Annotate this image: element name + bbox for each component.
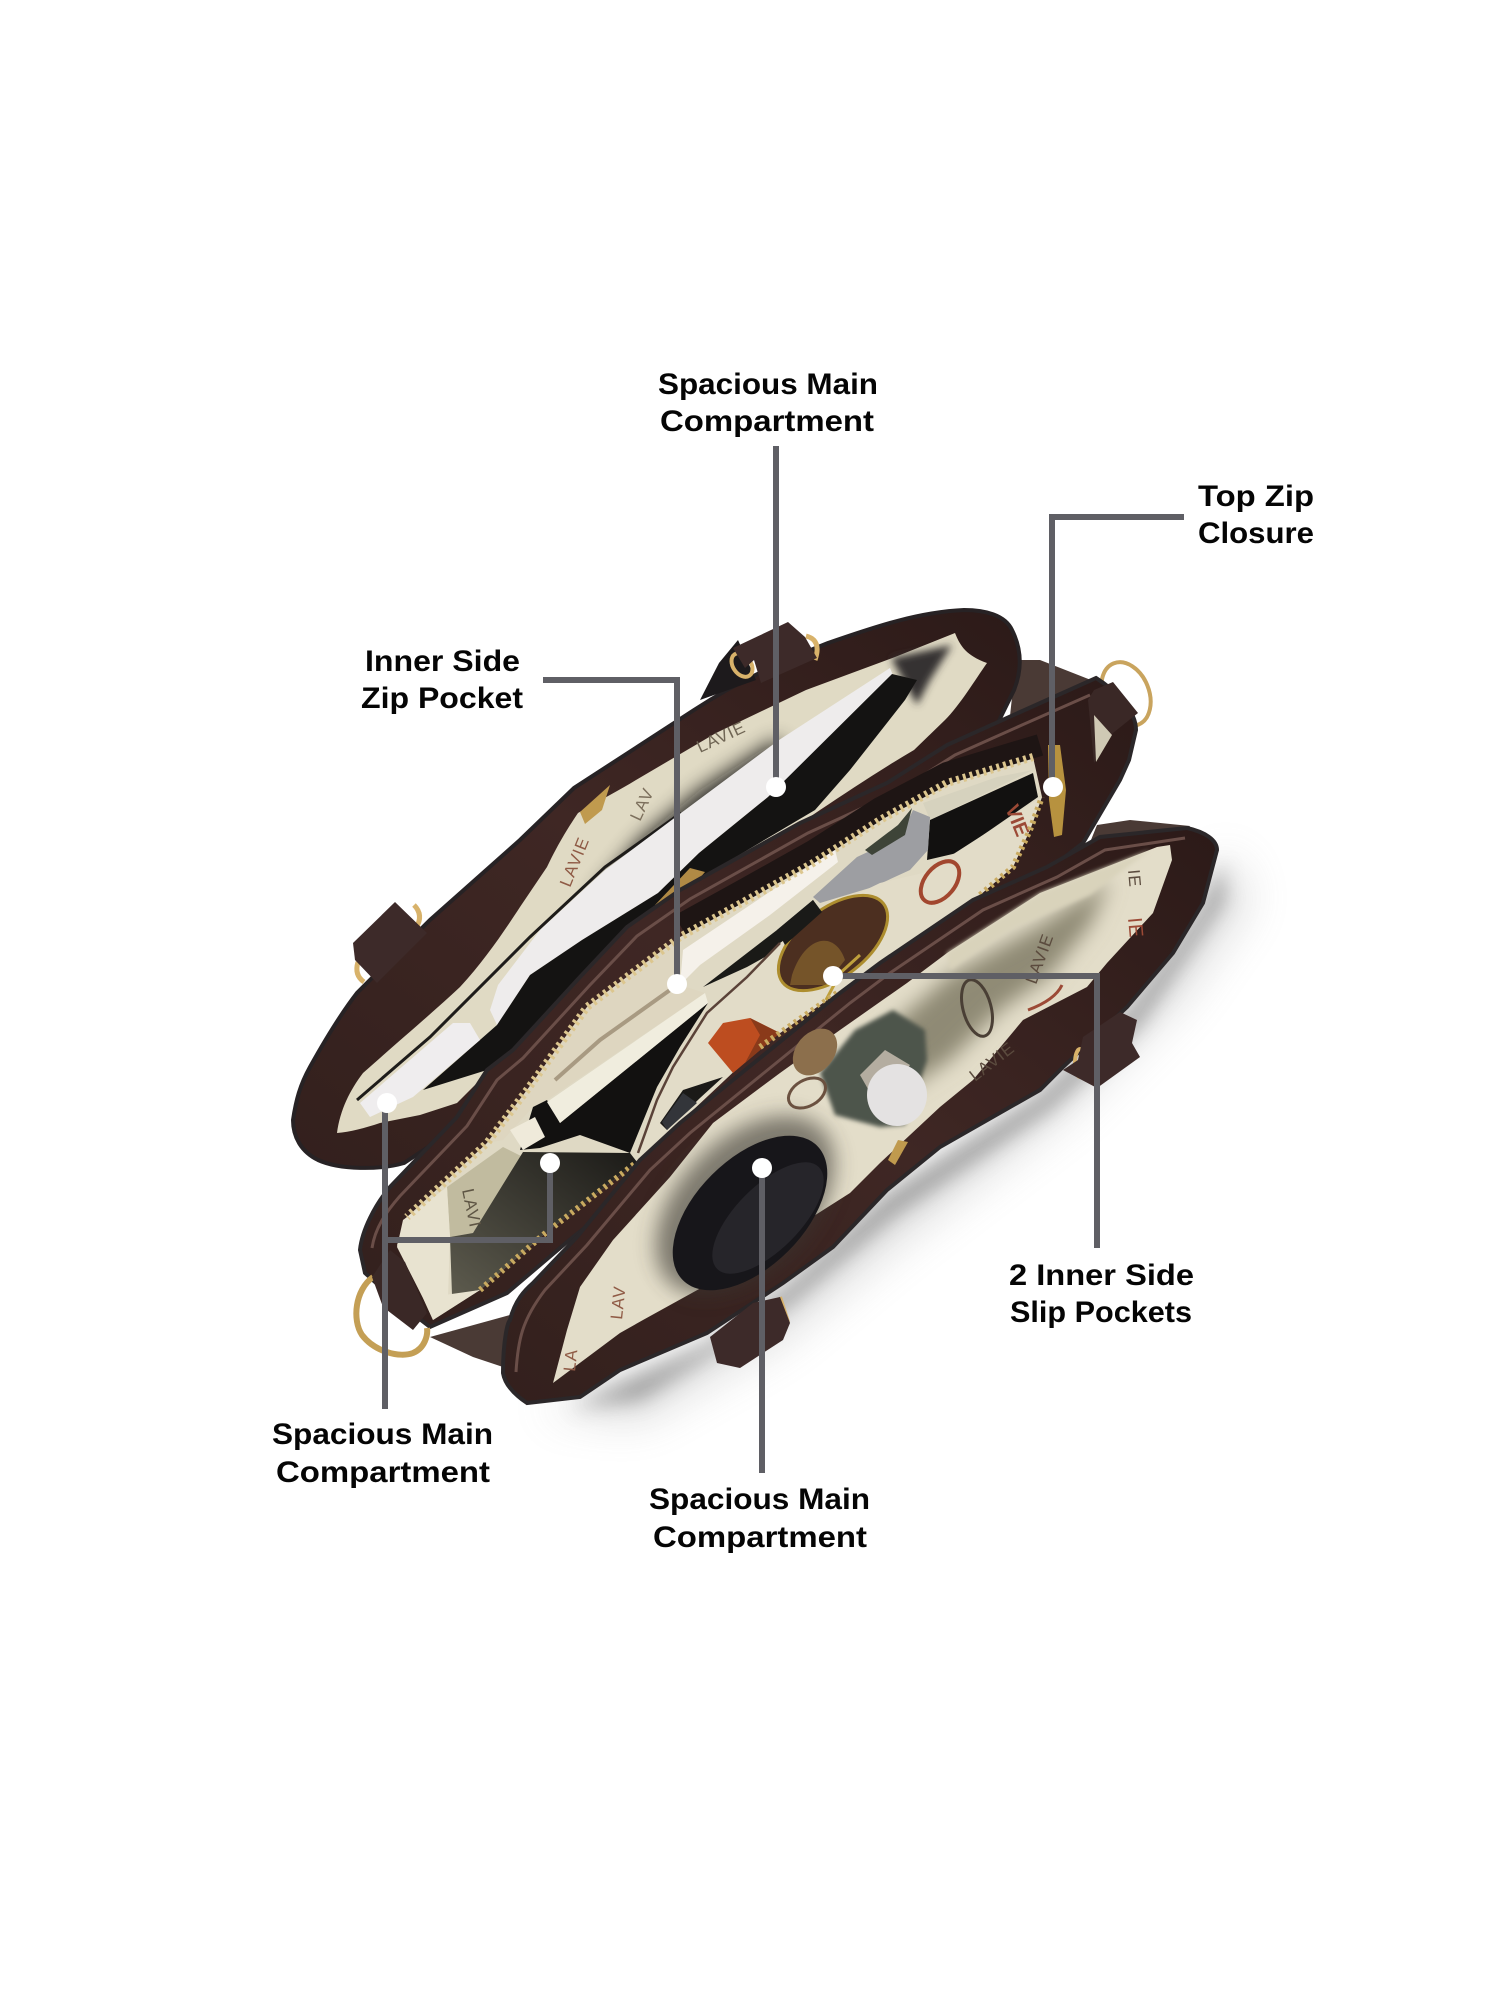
dark strip beside slip pocket xyxy=(703,900,820,987)
leader: top spacious main compartment xyxy=(773,446,779,787)
black pocket wedge xyxy=(927,773,1038,860)
lining centre shading xyxy=(875,880,1110,1090)
compact case xyxy=(645,1108,855,1318)
dark box xyxy=(660,1077,723,1130)
cream panel behind zip xyxy=(923,770,1033,820)
back panel fold line xyxy=(357,813,681,1100)
front panel leather xyxy=(503,828,1217,1403)
back panel upper shadow xyxy=(891,645,952,705)
label: spacious main compartment (left) xyxy=(272,1418,493,1489)
dot: slip pockets xyxy=(823,966,843,986)
snap button xyxy=(784,1020,846,1084)
inner hardware xyxy=(655,868,705,915)
leader lines xyxy=(385,446,1184,1473)
label: inner side zip pocket: Inner Side xyxy=(365,645,520,678)
leader: inner side slip pockets xyxy=(834,976,1097,1248)
zip pocket cream xyxy=(487,937,705,1143)
label: top zip closure: Top Zip xyxy=(1198,480,1314,513)
slip pocket and cream tip xyxy=(638,797,1042,1160)
dot: left compartment xyxy=(377,1093,397,1113)
left cream fold xyxy=(397,1187,450,1298)
label: spacious main compartment (left): Spacious Main xyxy=(272,1418,493,1451)
lining upper fold xyxy=(947,850,1150,970)
zipper tape xyxy=(680,745,1040,925)
marker dots xyxy=(377,777,1063,1178)
lining logo text: LAVI xyxy=(458,1187,485,1230)
front panel lining xyxy=(553,845,1172,1383)
compartment: back panel xyxy=(293,610,1020,1168)
lining logo mark xyxy=(956,976,998,1040)
dark pocket floor xyxy=(450,1152,637,1295)
lining logo text: LAVIE xyxy=(966,1038,1018,1085)
white strip in zip pocket xyxy=(680,850,838,985)
label: spacious main compartment (top): Compartment xyxy=(660,405,874,438)
lining logo text: LAVIE xyxy=(556,834,593,889)
dot: left compartment second xyxy=(540,1153,560,1173)
lining logo text: LAVIE xyxy=(1022,931,1058,986)
lining logo text: LAVIE xyxy=(694,717,749,757)
leader: left spacious main compartment xyxy=(385,1103,550,1409)
label: 2 inner side slip pockets: Slip Pockets xyxy=(1010,1296,1192,1329)
slip pocket edge xyxy=(638,943,780,1153)
label: spacious main compartment (bottom): Compartment xyxy=(653,1521,867,1554)
label: 2 inner side slip pockets xyxy=(1009,1259,1194,1329)
zip puller xyxy=(1048,745,1066,837)
left interior wall xyxy=(447,1147,523,1237)
zip pocket inner seam xyxy=(555,990,670,1080)
label: spacious main compartment (bottom): Spacious Main xyxy=(649,1483,870,1516)
front panel ridge xyxy=(516,838,1185,1372)
leader: inner side zip pocket xyxy=(543,680,677,984)
lining logo mark xyxy=(1028,985,1062,1010)
bottom cream fold xyxy=(423,1290,480,1320)
strap tab: bottom xyxy=(710,1297,790,1368)
lining logo text: LAV xyxy=(607,1285,630,1320)
label: inner side zip pocket xyxy=(361,645,523,715)
label: spacious main compartment (bottom) xyxy=(649,1483,870,1554)
dot: bottom compartment xyxy=(752,1158,772,1178)
lining logo text: IE xyxy=(1124,869,1145,888)
grey item xyxy=(813,808,930,903)
strap tab: left xyxy=(353,902,427,983)
notebook upper pages xyxy=(490,668,895,1025)
monogram body behind panels xyxy=(430,660,1190,1367)
gold fold xyxy=(888,1140,908,1165)
lining logo text: IE xyxy=(1123,917,1147,939)
leader: top zip closure xyxy=(1052,517,1184,787)
compartment: middle panel xyxy=(356,678,1138,1355)
drop shadow xyxy=(540,850,1250,1420)
hardware xyxy=(580,785,610,824)
handbag illustration xyxy=(293,610,1217,1403)
lipstick xyxy=(708,1018,780,1073)
strap and D ring: lower left xyxy=(356,1250,427,1355)
black book xyxy=(520,1003,708,1153)
label: top zip closure xyxy=(1198,480,1314,550)
pocket logo text: VIE xyxy=(1000,802,1033,840)
perfume bottle xyxy=(820,1010,927,1127)
dot: top compartment xyxy=(766,777,786,797)
D ring: upper right xyxy=(1092,655,1160,733)
sunglasses xyxy=(762,877,904,1009)
zipper teeth: upper run xyxy=(407,757,1033,1217)
compartment: front panel xyxy=(503,828,1217,1403)
label: spacious main compartment (top): Spacious Main xyxy=(658,368,878,401)
middle panel ridge xyxy=(372,695,1090,1248)
label: inner side zip pocket: Zip Pocket xyxy=(361,682,523,715)
strap tab: right xyxy=(1063,1012,1140,1088)
lining logo text: LAV xyxy=(626,785,658,824)
book pages xyxy=(547,993,708,1123)
strap tab: top xyxy=(700,622,817,700)
label: spacious main compartment (left): Compartment xyxy=(276,1456,490,1489)
label: top zip closure: Closure xyxy=(1198,517,1314,550)
black sleeve xyxy=(423,674,917,1090)
middle panel leather xyxy=(360,678,1136,1327)
strap upper right xyxy=(1088,682,1138,763)
notebook lower block xyxy=(360,1023,480,1117)
zip opening lining xyxy=(397,757,1042,1320)
perfume cap xyxy=(867,1064,927,1126)
lining logo mark xyxy=(783,1072,831,1114)
label: 2 inner side slip pockets: 2 Inner Side xyxy=(1009,1259,1194,1292)
compact lid xyxy=(694,1144,842,1292)
label: spacious main compartment (top) xyxy=(658,368,878,438)
small cream item xyxy=(510,1117,545,1150)
back panel lining xyxy=(337,633,987,1133)
lining logo text: LA xyxy=(560,1348,581,1372)
dot: zip pocket xyxy=(667,974,687,994)
dot: zip closure xyxy=(1043,777,1063,797)
back panel inner shadow xyxy=(590,738,785,900)
zipper teeth: lower run xyxy=(480,797,1042,1290)
back panel leather xyxy=(293,610,1020,1168)
pocket logo xyxy=(913,854,967,910)
compact shadow xyxy=(622,1082,868,1328)
leader: bottom spacious main compartment xyxy=(759,1168,765,1473)
